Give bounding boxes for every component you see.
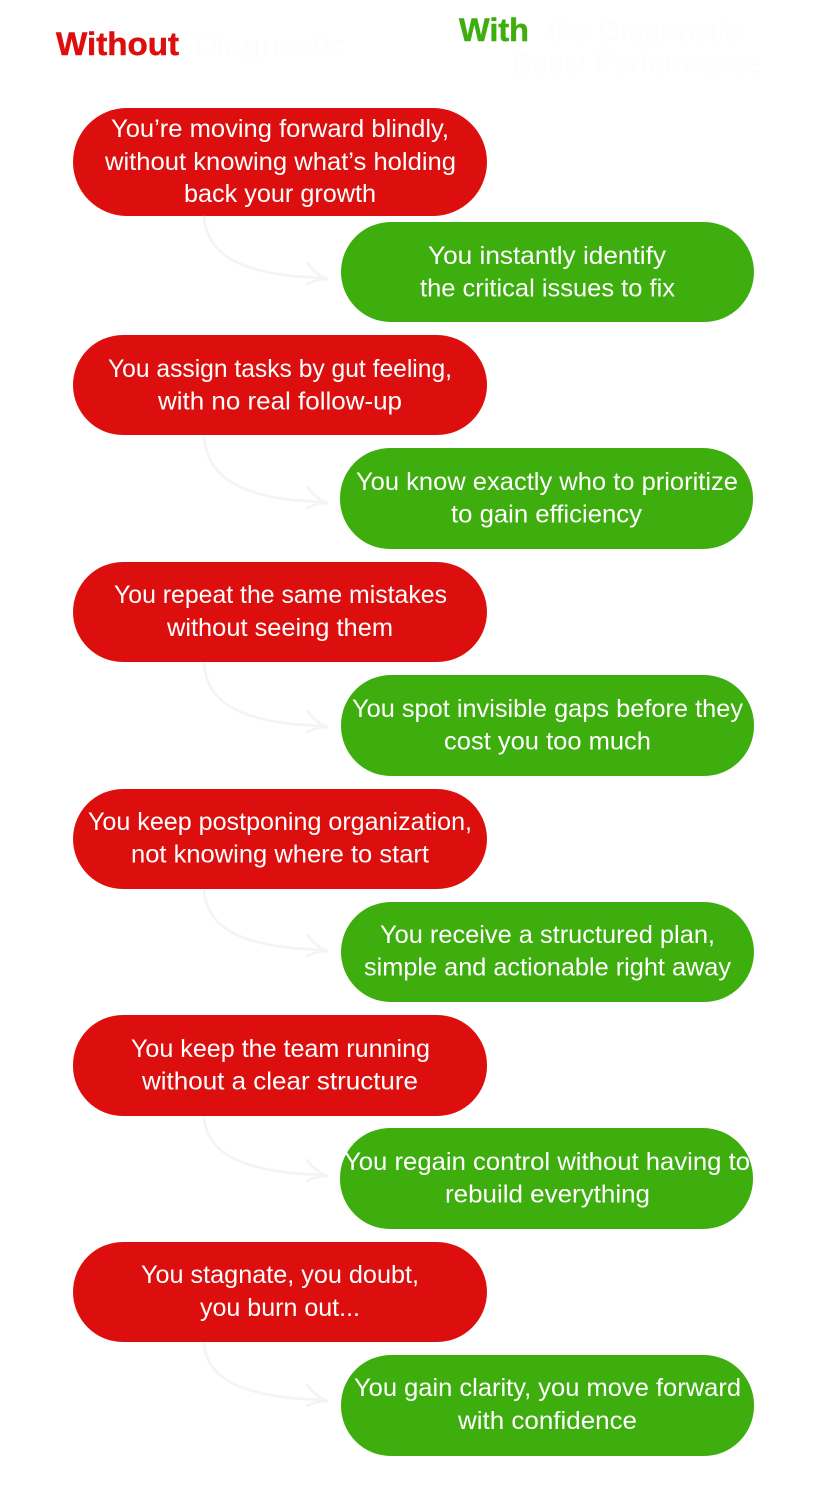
row 4: without bbox=[73, 789, 487, 889]
row 4: with bbox=[341, 902, 754, 1002]
row 4: with: You receive a structured plan, bbox=[380, 921, 715, 949]
arrow 6 bbox=[204, 1344, 327, 1406]
row 4: without: not knowing where to start bbox=[131, 840, 429, 868]
row 6: with: You gain clarity, you move forward bbox=[354, 1374, 741, 1402]
row 1: with: You instantly identify bbox=[428, 242, 667, 270]
row 2: with: to gain efficiency bbox=[451, 500, 642, 528]
heading: without diagnostic bbox=[56, 26, 346, 62]
row 2: without: You assign tasks by gut feeling, bbox=[108, 355, 452, 383]
row 6: without bbox=[73, 1242, 487, 1342]
row 6: with bbox=[341, 1355, 754, 1456]
heading: with diagnostic: the Diagnostic bbox=[548, 15, 740, 48]
heading: without diagnostic: Without bbox=[56, 26, 179, 62]
row 6: with: with confidence bbox=[457, 1407, 637, 1435]
row 1: without: back your growth bbox=[184, 180, 376, 208]
row 3: with: You spot invisible gaps before they bbox=[352, 695, 744, 723]
row 2: with: You know exactly who to prioritize bbox=[356, 468, 738, 496]
row 5: without bbox=[73, 1015, 487, 1116]
row 3: with: cost you too much bbox=[444, 728, 651, 756]
row 5: with: rebuild everything bbox=[445, 1180, 650, 1208]
row 6: without: you burn out... bbox=[200, 1294, 360, 1322]
row 4: without: You keep postponing organization, bbox=[88, 808, 472, 836]
row 1: without: You’re moving forward blindly, bbox=[111, 115, 449, 143]
row 1: without: without knowing what’s holding bbox=[104, 148, 456, 176]
arrow 3 bbox=[204, 664, 327, 732]
row 4: with: simple and actionable right away bbox=[364, 954, 731, 982]
heading: with diagnostic: Boost Performance bbox=[512, 47, 762, 80]
row 3: without: You repeat the same mistakes bbox=[114, 581, 447, 609]
row 6: without: You stagnate, you doubt, bbox=[141, 1261, 419, 1289]
row 1: with: the critical issues to fix bbox=[420, 274, 676, 302]
row 3: with bbox=[341, 675, 754, 776]
row 5: with: You regain control without having to bbox=[344, 1148, 750, 1176]
arrow 2 bbox=[204, 437, 327, 508]
heading: without diagnostic: Diagnostic bbox=[194, 29, 346, 62]
row 5: without: without a clear structure bbox=[141, 1068, 418, 1096]
row 1: with bbox=[341, 222, 754, 322]
row 2: without bbox=[73, 335, 487, 435]
arrow 5 bbox=[204, 1118, 327, 1181]
arrow 1 bbox=[204, 217, 327, 284]
heading: with diagnostic: With bbox=[459, 12, 529, 48]
row 3: without bbox=[73, 562, 487, 662]
row 2: with bbox=[340, 448, 753, 549]
row 3: without: without seeing them bbox=[166, 614, 393, 642]
arrow 4 bbox=[204, 891, 327, 956]
heading: with diagnostic bbox=[459, 12, 762, 80]
row 5: without: You keep the team running bbox=[131, 1035, 430, 1063]
row 5: with bbox=[340, 1128, 753, 1229]
row 2: without: with no real follow-up bbox=[157, 388, 402, 416]
row 1: without bbox=[73, 108, 487, 216]
